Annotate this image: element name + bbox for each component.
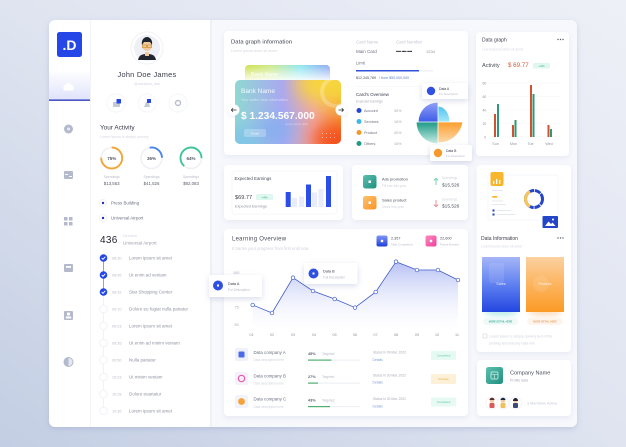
- activity heading: Your Activity: [100, 124, 135, 132]
- grouped bar chart: Mon: [510, 142, 517, 146]
- sales text: Sales product: [382, 198, 407, 202]
- tooltip: data A: [422, 83, 468, 99]
- panel: expected earnings: [224, 165, 343, 220]
- icon: contact: [64, 311, 73, 320]
- panel: profile and activity: [100, 32, 206, 415]
- row: data company B: [235, 372, 456, 386]
- timeline: Ut enim ad veniam: [129, 272, 167, 278]
- overview legend: [356, 108, 402, 146]
- ads text: Fill rate this year: [382, 184, 407, 188]
- front bank card: Your wallet data information: [241, 98, 288, 102]
- line chart: 75: [234, 306, 239, 310]
- note: [483, 334, 552, 346]
- activity rings: 64%: [186, 156, 196, 161]
- arrow: up: [434, 178, 438, 185]
- heading: Data Information: [481, 236, 518, 242]
- timeline: Ut minim veniam: [129, 374, 163, 380]
- row: data company C: Completed: [437, 400, 451, 404]
- overview legend: 30%: [394, 109, 402, 113]
- sales spendings: [442, 198, 460, 210]
- icon: ads: [363, 175, 376, 188]
- back card: [245, 65, 330, 89]
- note: Lorem ipsum is simply dummy text of the: [489, 334, 552, 338]
- stat: tasks completed: [376, 236, 413, 246]
- activity rings: Spendings: [143, 175, 160, 179]
- location list: Universal Airport: [111, 216, 144, 220]
- activity rings: [101, 143, 206, 186]
- tooltip: data A: For Description: [228, 288, 250, 292]
- sales spendings: $15,526: [442, 204, 460, 210]
- line chart: 50: [234, 323, 239, 327]
- grouped bar chart: Sun: [492, 142, 499, 146]
- timeline: Lorem ipsum sit amet: [129, 256, 173, 260]
- front bank card: Bank Name: [241, 88, 275, 95]
- tooltip: data B: Full Description: [323, 276, 345, 280]
- overview legend: Product: [364, 131, 378, 135]
- card details: Card Number: [396, 40, 423, 44]
- overview legend: Account: [364, 109, 379, 113]
- tooltip: data B: [430, 145, 472, 161]
- grouped bar chart: [482, 82, 561, 146]
- tooltip: data A: For Description: [439, 92, 458, 96]
- card details: Limit: [356, 60, 366, 66]
- row: data company C: Status in 30 Mar, 2022: [373, 397, 406, 401]
- subheading: It tracks your progress from first until now: [232, 246, 310, 251]
- line chart: [233, 260, 460, 337]
- row: data company B: 27%: [308, 375, 316, 379]
- row: data company B: Targeted: [322, 375, 335, 379]
- grouped bar chart: 20: [482, 122, 486, 126]
- sales tile: Sales: [496, 282, 506, 286]
- profile data: Profile data: [510, 378, 528, 382]
- row: data company A: Details: [372, 358, 383, 362]
- row: data company B: Data company B: [254, 374, 286, 378]
- timeline: Star Shopping Center: [129, 290, 173, 294]
- grouped bar chart: 40: [482, 108, 486, 112]
- timeline: 10:23: [112, 376, 122, 380]
- company name: Company Name: [510, 370, 550, 376]
- timeline: Lorem ipsum sit amet: [129, 408, 173, 414]
- row: data company C: Data company C: [254, 396, 286, 402]
- front bank card: [235, 80, 341, 144]
- activity value: [482, 62, 550, 69]
- arrow: next: [336, 104, 346, 116]
- profile name: John Doe James: [118, 70, 177, 79]
- activity rings: 75%: [107, 156, 116, 161]
- line chart: 06: [353, 333, 357, 337]
- timeline: 10:28: [112, 392, 122, 396]
- timeline: [100, 254, 189, 415]
- sales text: Deals this year: [382, 205, 405, 209]
- timeline: 08:45: [112, 274, 122, 278]
- logo: [57, 32, 82, 57]
- line chart: 04: [312, 333, 316, 337]
- line chart: 11: [455, 333, 459, 337]
- sales spendings: Spendings: [442, 198, 457, 202]
- timeline: 08:32: [112, 290, 122, 294]
- activity subheading: Lorem Ipsum is simply dummy: [100, 135, 149, 139]
- arrow: previous: [228, 104, 240, 116]
- subheading: Lorem ipsum dolor sit amet: [231, 49, 278, 53]
- limit progress bar: / from $50,000,000: [379, 76, 409, 80]
- overview legend: Others: [364, 142, 375, 146]
- activity rings: Spendings: [104, 175, 120, 179]
- timeline: Lorem ipsum sit amet: [129, 324, 173, 328]
- timeline: Dolore euariatur: [129, 392, 162, 396]
- line chart: 03: [291, 333, 295, 337]
- card details: Main Card: [356, 49, 377, 54]
- row: data company C: 43%: [308, 398, 316, 402]
- stat: points earned: [426, 236, 459, 246]
- illustration: [488, 172, 558, 228]
- tooltip: data B: [304, 263, 358, 284]
- activity value: +4%: [538, 64, 545, 68]
- row: data company A: [235, 348, 456, 362]
- line chart: 02: [270, 333, 274, 337]
- panel: promotions: [352, 165, 468, 220]
- sales tile: [482, 257, 520, 316]
- arrow: down: [434, 200, 438, 207]
- grouped bar chart: 60: [482, 82, 486, 86]
- active home item: [49, 70, 90, 101]
- overview legend: Services: [364, 120, 379, 124]
- card overview heading: Expected Earnings: [356, 100, 383, 104]
- tooltip: data B: Data B: [446, 149, 457, 153]
- card overview heading: [356, 86, 426, 104]
- row: data company A: Status in 09 Mar, 2022: [373, 350, 406, 354]
- ads spendings: [442, 176, 460, 188]
- logo: .D: [62, 37, 76, 53]
- activity rings: Spendings: [183, 175, 199, 179]
- location list: Press Building: [111, 200, 140, 206]
- tooltip: data B: Data B: [323, 270, 335, 274]
- menu dots: [557, 237, 564, 239]
- tooltip: data B: For Description: [446, 154, 465, 158]
- ads spendings: $15,526: [442, 182, 460, 188]
- pill: product detail: MORE DETAIL HERE: [533, 321, 557, 324]
- overview legend: 16%: [394, 142, 402, 146]
- sales text: [382, 198, 407, 209]
- pill: sales detail: [483, 318, 518, 325]
- activity rings: 36%: [147, 156, 156, 161]
- pie chart: [417, 103, 462, 143]
- grouped bar chart: 0: [484, 136, 486, 140]
- activity rings: $13,563: [104, 181, 120, 186]
- product tile: Product: [538, 282, 552, 286]
- overview legend: 16%: [394, 120, 402, 124]
- card overview heading: Card's Overview: [356, 92, 390, 97]
- timeline: 08:30: [112, 256, 122, 260]
- row: data company C: Data description here: [254, 405, 284, 409]
- activity value: $ 69.77: [508, 62, 529, 69]
- line chart: 08: [394, 333, 398, 337]
- row: data company B: Data description here: [254, 382, 284, 386]
- panel: data information: [476, 165, 571, 352]
- grouped bar chart: 60: [482, 95, 486, 99]
- front bank card: $ 1.234.567.000: [241, 111, 315, 122]
- timeline: Dolore eu fugiat nulla pariatur: [129, 306, 189, 312]
- amount and change badge: $69.77: [235, 195, 252, 201]
- subheading: Lorem ipsum dolor sit amet: [482, 48, 523, 52]
- panel: data graph information: [216, 31, 472, 161]
- line chart: 100: [233, 271, 239, 275]
- timeline: 09:10: [112, 308, 122, 312]
- heading: Learning Overview: [232, 236, 287, 242]
- row: data company A: Data company A: [254, 350, 286, 355]
- sidebar navigation: [49, 32, 90, 366]
- location list: [100, 200, 144, 222]
- activity rings: $41,526: [144, 181, 160, 186]
- row: data company B: Status in 30 Mar, 2022: [373, 374, 406, 378]
- member avatars: [486, 397, 522, 409]
- line chart: 09: [415, 333, 419, 337]
- amount and change badge: +4%: [261, 196, 268, 200]
- tooltip: data A: [209, 275, 262, 297]
- route number: 436: [100, 235, 118, 246]
- stat: tasks completed: Task Completed: [391, 242, 413, 246]
- stat: points earned: 22,600: [440, 236, 452, 240]
- card details: 1234: [426, 49, 436, 54]
- dashboard shell: [49, 20, 577, 427]
- row: data company A: Data description here: [254, 358, 284, 362]
- card details: [356, 40, 436, 66]
- timeline: Ut enim ad minim veniam: [129, 340, 180, 346]
- row: data company C: [235, 395, 456, 409]
- row: data company B: Process: [438, 377, 449, 381]
- card details: Card Name: [356, 40, 379, 44]
- tooltip: data A: Data A: [228, 282, 240, 286]
- profile handle: @userjohn_doe: [134, 82, 160, 86]
- members label: 3 Members Active: [527, 402, 557, 406]
- timeline: 09:35: [112, 342, 122, 346]
- panel: data graph: [476, 32, 569, 156]
- line chart: 07: [373, 333, 378, 337]
- amount and change badge: Expected Earnings: [235, 204, 267, 208]
- subheading: Lorem ipsum dolor sit amet: [481, 244, 522, 248]
- overview legend: 40%: [394, 131, 402, 135]
- grouped bar chart: Wed: [545, 142, 553, 146]
- avatar: [131, 32, 163, 64]
- bar chart: [286, 176, 331, 207]
- front bank card: Lorem ipsum dolor: [285, 122, 308, 126]
- route direction: [123, 234, 157, 246]
- row: data company A: Completed: [437, 354, 451, 358]
- pill: product detail: [527, 318, 563, 325]
- line chart: 05: [332, 333, 337, 337]
- limit progress bar: $12,345,789: [356, 76, 376, 80]
- icon: card: [64, 171, 73, 179]
- tooltip: data A: Data A: [439, 87, 450, 91]
- icon: sales: [363, 196, 376, 210]
- product tile: [526, 257, 564, 316]
- activity rings: $92,083: [183, 181, 199, 186]
- timeline: 09:23: [112, 324, 122, 328]
- heading: Expected Earnings: [234, 176, 272, 181]
- back card: Bank Name: [251, 72, 278, 78]
- route direction: Universal Airport: [123, 240, 157, 246]
- panel: company: [477, 360, 571, 416]
- icon: company: [486, 367, 503, 384]
- front bank card: Detail: [251, 132, 259, 136]
- timeline: 10:36: [112, 410, 122, 414]
- row: data company B: Details: [372, 380, 383, 384]
- grouped bar chart: Tue: [527, 142, 534, 146]
- ads text: [382, 176, 408, 188]
- row: data company C: Targeted: [322, 398, 335, 402]
- route direction: Direction: [123, 234, 137, 238]
- card details: •••• •••• ••••: [396, 49, 413, 54]
- ads text: Ads promotion: [382, 176, 408, 182]
- menu dots: [557, 39, 564, 40]
- limit progress bar: [356, 70, 433, 80]
- amount and change badge: [235, 194, 273, 208]
- stat: points earned: Points Earned: [440, 242, 459, 246]
- line chart: 10: [435, 333, 439, 337]
- row: data company C: Details: [372, 404, 383, 408]
- icon: contrast: [64, 358, 73, 366]
- activity value: Activity: [482, 63, 500, 69]
- timeline: Nulla pariatur: [129, 358, 156, 362]
- icon: settings: [64, 124, 73, 134]
- row: data company A: 45%: [308, 352, 316, 356]
- icon: inbox: [64, 264, 73, 272]
- line chart: 01: [249, 333, 254, 337]
- ads spendings: Spendings: [442, 176, 457, 180]
- pill: sales detail: MORE DETAIL HERE: [489, 321, 513, 324]
- icon: grid: [64, 217, 72, 226]
- heading: Data graph information: [231, 40, 292, 46]
- panel: learning overview: [209, 229, 468, 416]
- stat: tasks completed: 2,357: [391, 236, 401, 240]
- timeline: 09:50: [112, 358, 122, 362]
- note: printing and industry data info: [489, 342, 535, 346]
- heading: Data graph: [482, 38, 507, 44]
- row: data company A: Targeted: [322, 352, 335, 356]
- profile actions: [107, 94, 187, 112]
